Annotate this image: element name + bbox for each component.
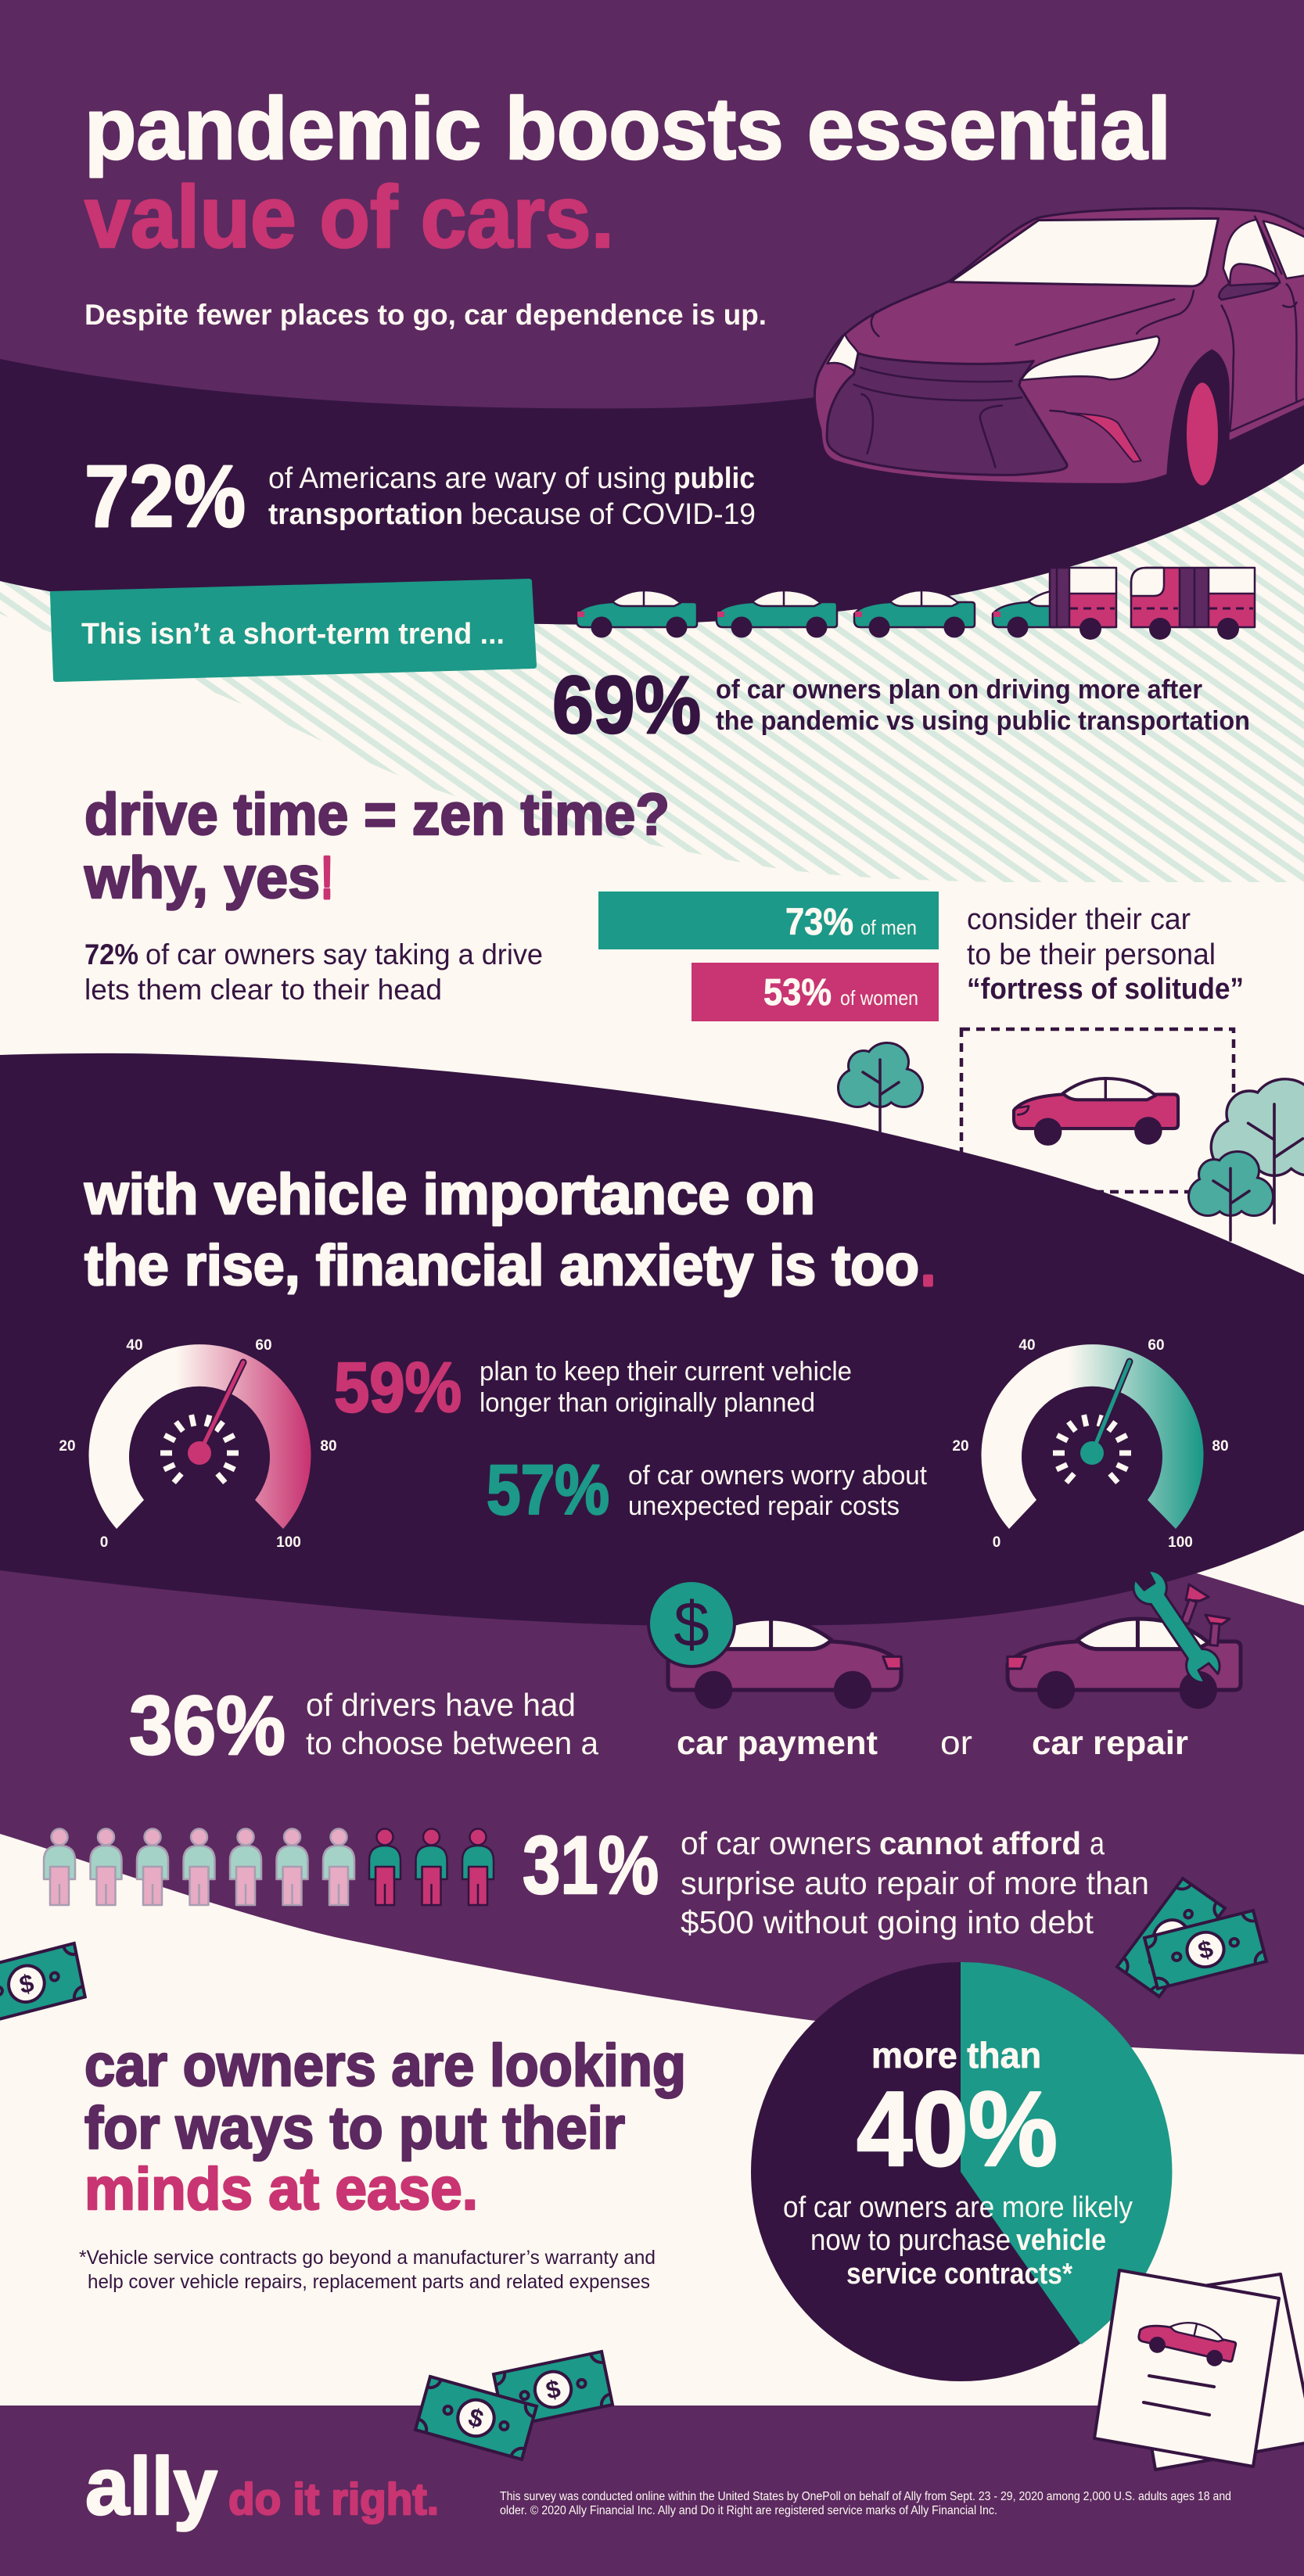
stat: 31% cannot afford — [523, 1820, 1149, 1940]
icon: small tree left — [839, 1044, 921, 1132]
icon: person 6 — [277, 1828, 308, 1905]
logo: ally do it right — [85, 2441, 439, 2532]
right headlight — [1022, 336, 1159, 380]
stat: 31% cannot afford: $500 without going into debt — [681, 1904, 1094, 1940]
stat: 31% cannot afford: of car owners — [681, 1825, 871, 1861]
icon: person 4 — [183, 1828, 214, 1905]
title: pandemic boosts essential — [84, 80, 1171, 178]
bar: 73% of men: 73% — [785, 902, 853, 943]
stat: 36% payment or repair: car repair — [1032, 1724, 1188, 1762]
text: fortress of solitude: to be their personal — [967, 938, 1216, 971]
icon: teal car 1 — [577, 590, 697, 638]
icon: bus front section — [1131, 568, 1255, 640]
windshield — [950, 218, 1218, 286]
heading: drive time: ! — [322, 845, 332, 910]
stat: 69% driving more: of car owners plan on driving more after — [716, 675, 1202, 705]
stat: 31% cannot afford: surprise auto repair of more than — [681, 1865, 1149, 1901]
icon: dollar bill back, bottom — [494, 2352, 612, 2427]
fog vent — [1065, 413, 1141, 462]
stat: 72% public transportation: because of COVID-19 — [471, 498, 756, 531]
stat: 72% public transportation: public — [674, 462, 755, 495]
text: fortress of solitude — [967, 903, 1244, 1006]
text: 72% clear their head — [84, 938, 543, 1006]
pie chart: more than 40%: service contracts* — [846, 2258, 1072, 2291]
footnote: vehicle service contracts — [79, 2247, 656, 2293]
gauge: pink 59%: 100 — [276, 1534, 301, 1551]
grille — [827, 353, 1067, 475]
stat: 36% payment or repair: car payment — [677, 1724, 878, 1762]
pie chart: more than 40%: now to purchase — [810, 2224, 1011, 2257]
banner: short-term trend: This isn’t a short-term trend ... — [81, 618, 505, 651]
stat: 72% public transportation: of Americans are wary of using — [268, 462, 666, 495]
heading: minds at ease — [84, 2032, 686, 2223]
pie chart: more than 40%: more than — [871, 2035, 1041, 2076]
icon: bolts — [1181, 1584, 1230, 1645]
stat: 69% driving more: 69% — [552, 660, 701, 751]
icon: person 1 — [44, 1828, 75, 1905]
pie chart: more than 40% — [751, 1962, 1172, 2381]
stat: 31% cannot afford: 31% — [523, 1820, 659, 1911]
heading: drive time — [84, 781, 670, 910]
gauge: pink 59%: 0 — [100, 1534, 108, 1551]
bar: 53% of women — [692, 963, 939, 1021]
icon: car payment car with coin: $ — [674, 1589, 709, 1660]
stat: 69% driving more: the pandemic vs using public transportation — [716, 706, 1250, 736]
icon: small tree right — [1190, 1153, 1272, 1240]
stat: 59% keep vehicle: 59% — [334, 1349, 462, 1427]
gauge: teal 57%: 60 — [1148, 1337, 1165, 1354]
stat: 31% cannot afford: cannot afford — [879, 1825, 1081, 1861]
heading: drive time: drive time = zen time? — [84, 781, 670, 847]
front wheel — [1187, 382, 1218, 486]
icon: pink car on document — [1136, 2312, 1238, 2370]
stat: 57% repair costs — [487, 1451, 928, 1530]
stat: 31% cannot afford: a — [1090, 1825, 1105, 1861]
icon: dollar bill back, right — [1117, 1878, 1225, 1997]
background: dark band behind 72% stat — [0, 352, 1304, 625]
hood creases — [1016, 300, 1174, 345]
icon: dollar bill, left edge: $ — [17, 1968, 36, 2000]
icon: service contract document — [1094, 2270, 1304, 2470]
icon: dollar bill front, bottom — [415, 2377, 537, 2459]
heading: minds at ease: minds at ease. — [84, 2156, 478, 2223]
icon: large pale tree right — [1212, 1081, 1304, 1223]
icon: dollar bill front, right: $ — [1195, 1935, 1216, 1964]
stat: 59% keep vehicle — [334, 1349, 852, 1427]
icon: person 5 — [230, 1828, 261, 1905]
icon: person 7 — [323, 1828, 354, 1905]
icon: dollar bill back, bottom: $ — [544, 2374, 563, 2405]
stat: 69% driving more — [552, 660, 1250, 751]
icon: teal car 4 — [993, 590, 1113, 638]
icon: person 8 highlighted — [369, 1828, 401, 1905]
heading: minds at ease: car owners are looking — [84, 2032, 686, 2099]
icon: dollar bill front, right — [1144, 1910, 1266, 1989]
pictogram: 10 people, 3 highlighted — [44, 1828, 494, 1905]
stat: 57% repair costs: 57% — [487, 1451, 609, 1530]
icon: pink car — [1014, 1078, 1178, 1146]
icon: teal car 2 — [717, 590, 837, 638]
text: fortress of solitude: “fortress of solitude” — [967, 973, 1244, 1006]
heading: drive time: why, yes — [84, 845, 320, 910]
heading: financial anxiety: the rise, financial anxiety is too — [84, 1234, 919, 1297]
icon: person 9 highlighted — [416, 1828, 447, 1905]
logo: ally do it right: do it right. — [228, 2474, 439, 2524]
gauge: teal 57% — [952, 1337, 1229, 1551]
title — [84, 80, 1171, 266]
bar: 73% of men — [598, 892, 939, 949]
text: fortress of solitude: consider their car — [967, 903, 1191, 936]
stat: 72% public transportation: transportation — [268, 498, 463, 531]
stat: 59% keep vehicle: plan to keep their current vehicle — [480, 1357, 852, 1387]
stat: 57% repair costs: unexpected repair costs — [628, 1491, 900, 1521]
text: 72% clear their head: lets them clear to their head — [84, 974, 442, 1006]
side windows — [1223, 220, 1278, 285]
footer band — [0, 2406, 1304, 2576]
banner: short-term trend — [50, 579, 537, 682]
footnote: vehicle service contracts: help cover vehicle repairs, replacement parts and related expenses — [88, 2271, 650, 2293]
dashed box around car — [961, 1029, 1234, 1192]
heading: minds at ease: for ways to put their — [84, 2095, 625, 2162]
text: 72% clear their head: 72% — [84, 938, 138, 970]
background: purple choice section — [0, 1556, 1304, 2054]
stat: 72% public transportation: 72% — [84, 447, 246, 545]
icon: wrench — [1128, 1566, 1225, 1688]
stat: 36% payment or repair: 36% — [129, 1678, 286, 1772]
heading: financial anxiety — [84, 1163, 935, 1297]
gauge: teal 57%: 0 — [993, 1534, 1000, 1551]
icon: teal car 3 — [854, 590, 975, 638]
gauge: pink 59%: 80 — [320, 1438, 337, 1455]
left headlight — [827, 334, 858, 371]
gauge: pink 59%: 60 — [255, 1337, 272, 1354]
gauge: teal 57%: 20 — [952, 1438, 969, 1455]
logo: ally do it right: ally — [85, 2441, 217, 2532]
gauge: pink 59% — [59, 1337, 337, 1551]
icon: car repair car with wrench — [1008, 1566, 1241, 1709]
icon: dollar bill front, bottom: $ — [465, 2402, 487, 2434]
pie chart: more than 40%: 40% — [857, 2069, 1058, 2188]
background: diagonal stripe field — [0, 391, 1304, 882]
illustration: large front-view car — [814, 208, 1304, 492]
stat: 59% keep vehicle: longer than originally planned — [480, 1388, 815, 1418]
gauge: pink 59%: 40 — [126, 1337, 143, 1354]
stat: 57% repair costs: of car owners worry about — [628, 1461, 928, 1491]
heading: financial anxiety: with vehicle importance on — [84, 1163, 815, 1226]
icon: person 3 — [137, 1828, 168, 1905]
footer disclaimer: older. © 2020 Ally Financial Inc. Ally and Do it Right are registered service marks of Ally Financial Inc. — [500, 2504, 997, 2517]
background: top purple header — [0, 0, 1304, 485]
footnote: vehicle service contracts: *Vehicle service contracts go beyond a manufacturer’s warranty and — [79, 2247, 656, 2269]
stat: 72% public transportation — [84, 447, 756, 545]
bar: 73% of men: of men — [860, 916, 917, 939]
gauge: teal 57%: 100 — [1168, 1534, 1193, 1551]
footer disclaimer — [500, 2490, 1231, 2517]
heading: financial anxiety: . — [921, 1234, 935, 1297]
gauge: teal 57%: 40 — [1018, 1337, 1036, 1354]
gauge: teal 57%: 80 — [1212, 1438, 1229, 1455]
background: dark financial anxiety section — [0, 1053, 1304, 1627]
stat: 36% payment or repair: of drivers have had — [306, 1687, 576, 1723]
title: value of cars. — [84, 168, 614, 266]
icon: bus rear section — [1050, 568, 1116, 640]
stat: 36% payment or repair: or — [940, 1724, 972, 1762]
bar: 53% of women: 53% — [763, 972, 832, 1014]
icon row: cars becoming a bus — [577, 568, 1255, 640]
mirror — [1219, 283, 1278, 300]
footer disclaimer: This survey was conducted online within the United States by OnePoll on behalf of Ally from Sept. 23 - 29, 2020 among 2,000 U.S. adults ages 18 and — [500, 2490, 1231, 2503]
icon: dollar bill, left edge — [0, 1943, 85, 2025]
stat: 36% payment or repair: to choose between a — [306, 1725, 598, 1761]
icon: person 10 highlighted — [462, 1828, 494, 1905]
stat: 36% payment or repair — [129, 1678, 1188, 1772]
pie chart: more than 40%: of car owners are more likely — [783, 2191, 1133, 2224]
pie chart: more than 40%: vehicle — [1016, 2224, 1106, 2257]
subtitle: Despite fewer places to go, car dependence is up. — [84, 299, 767, 331]
icon: car payment car with coin — [648, 1580, 901, 1709]
icon: person 2 — [91, 1828, 122, 1905]
text: 72% clear their head: of car owners say taking a drive — [145, 938, 543, 970]
gauge: pink 59%: 20 — [59, 1438, 76, 1455]
bar: 53% of women: of women — [840, 986, 918, 1010]
